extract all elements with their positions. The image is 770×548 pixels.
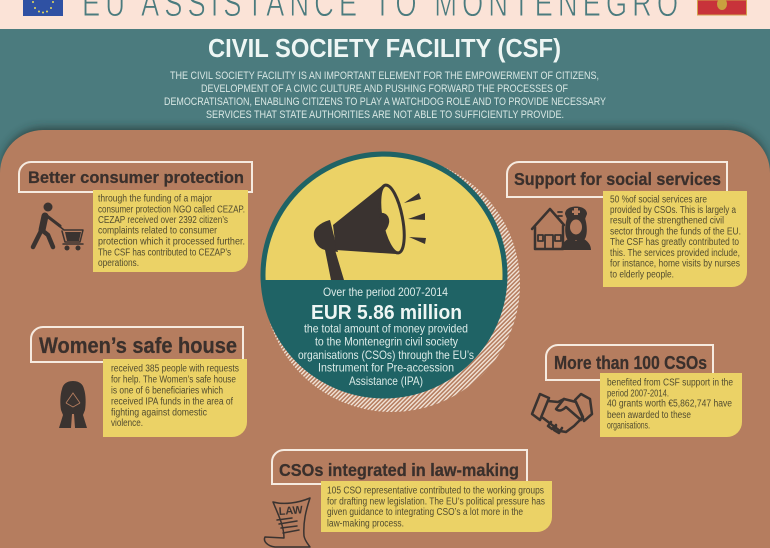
header band (0, 0, 770, 29)
heading frame (19, 162, 252, 192)
icon: person with shopping cart (33, 202, 83, 250)
icon: law scroll: LAW (278, 504, 304, 518)
text box (321, 481, 552, 532)
body text: to elderly people. (610, 269, 674, 280)
hatched circle shadow (264, 156, 520, 412)
text box (600, 373, 742, 437)
text box (603, 191, 747, 287)
icon: law scroll (264, 498, 310, 547)
body text: received 385 people with requests (111, 364, 239, 375)
funding statement (298, 286, 474, 388)
introduction text: DEVELOPMENT OF A CIVIC CULTURE AND PUSHING FORWARD THE PROCESSES OF (201, 83, 568, 95)
body text: 105 CSO representative contributed to the working groups (327, 485, 544, 496)
introduction text: SERVICES THAT STATE AUTHORITIES ARE NOT ABLE TO SUFFICIENTLY PROVIDE. (206, 109, 564, 121)
body text: for drafting new legislation. The EU’s political pressure has (327, 496, 545, 507)
body text: consumer protection NGO called CEZAP. (98, 204, 245, 215)
body text: is one of 6 beneficiaries which (111, 386, 223, 397)
panel: women's safe house (31, 327, 247, 437)
body text: fighting against domestic (111, 407, 207, 418)
introduction text: THE CIVIL SOCIETY FACILITY IS AN IMPORTANT ELEMENT FOR THE EMPOWERMENT OF CITIZENS, (170, 70, 599, 82)
body text (98, 194, 245, 269)
icon: EU flag (23, 0, 63, 16)
body text (327, 485, 545, 529)
heading: Better consumer protection (28, 169, 244, 187)
funding statement: the total amount of money provided (304, 322, 468, 335)
panel: CSOs integrated in law-making (264, 450, 552, 547)
panel shadow (0, 123, 770, 169)
body text: complaints related to consumer (98, 226, 218, 237)
panel: better consumer protection (19, 162, 252, 272)
funding statement: Assistance (IPA) (349, 375, 423, 388)
funding statement: organisations (CSOs) through the EU’s (298, 349, 474, 362)
body text: given guidance to integrating CSO’s a lot more in the (327, 507, 523, 518)
heading: Support for social services (514, 169, 721, 189)
text box (93, 190, 248, 272)
icon: house and nurse (532, 206, 591, 250)
body text: through the funding of a major (98, 194, 213, 205)
heading frame (31, 327, 243, 362)
heading frame (507, 162, 727, 197)
body text: The CSF has contributed to CEZAP’s (98, 247, 231, 258)
panel: support for social services (507, 162, 747, 287)
body text: organisations. (607, 420, 650, 431)
icon: megaphone (314, 183, 426, 280)
body text: 40 grants worth €5,862,747 have (607, 398, 732, 409)
funding statement: to the Montenegrin civil society (315, 336, 458, 349)
body text: for instance, home visits by nurses (610, 259, 740, 270)
icon: handshake (532, 394, 592, 433)
body text (607, 378, 733, 431)
body text: The CSF has greatly contributed to (610, 237, 739, 248)
funding statement: Instrument for Pre-accession (318, 362, 454, 375)
body text: for help. The Women’s safe house (111, 374, 236, 385)
body text: sector through the funds of the EU. (610, 226, 741, 237)
icon: seated woman (59, 381, 87, 428)
body text (610, 194, 741, 280)
heading: Women’s safe house (39, 333, 237, 358)
body text: period 2007-2014. (607, 388, 669, 399)
body text: violence. (111, 418, 143, 429)
introduction text: DEMOCRATISATION, ENABLING CITIZENS TO PLAY A WATCHDOG ROLE AND TO PROVIDE NECESSARY (164, 96, 606, 108)
body text: protection which it processed further. (98, 236, 245, 247)
body text: law-making process. (327, 518, 404, 529)
body text: result of the strengthened civil (610, 216, 724, 227)
body text: benefited from CSF support in the (607, 378, 733, 389)
heading: civil society facility: CIVIL SOCIETY FACILITY (CSF) (208, 33, 561, 63)
body text: been awarded to these (607, 410, 691, 421)
body text: received IPA funds in the area of (111, 397, 233, 408)
panel: more than 100 CSOs (532, 345, 742, 437)
text box (103, 359, 247, 437)
brown main panel (0, 130, 770, 548)
funding statement: Over the period 2007-2014 (323, 286, 448, 299)
heading frame (272, 450, 527, 484)
body text (111, 364, 239, 429)
funding statement: EUR 5.86 million (311, 301, 462, 324)
body text: 50 %of social services are (610, 194, 707, 205)
heading frame (546, 345, 713, 380)
body text: provided by CSOs. This is largely a (610, 205, 736, 216)
body text: this. The services provided include, (610, 248, 740, 259)
body text: operations. (98, 258, 139, 269)
icon: Montenegro flag (698, 0, 746, 15)
heading: CSOs integrated in law-making (279, 460, 519, 480)
body text: CEZAP received over 2392 citizen’s (98, 215, 228, 226)
introduction text (164, 70, 606, 121)
heading: More than 100 CSOs (554, 353, 707, 373)
central circle (260, 152, 508, 398)
